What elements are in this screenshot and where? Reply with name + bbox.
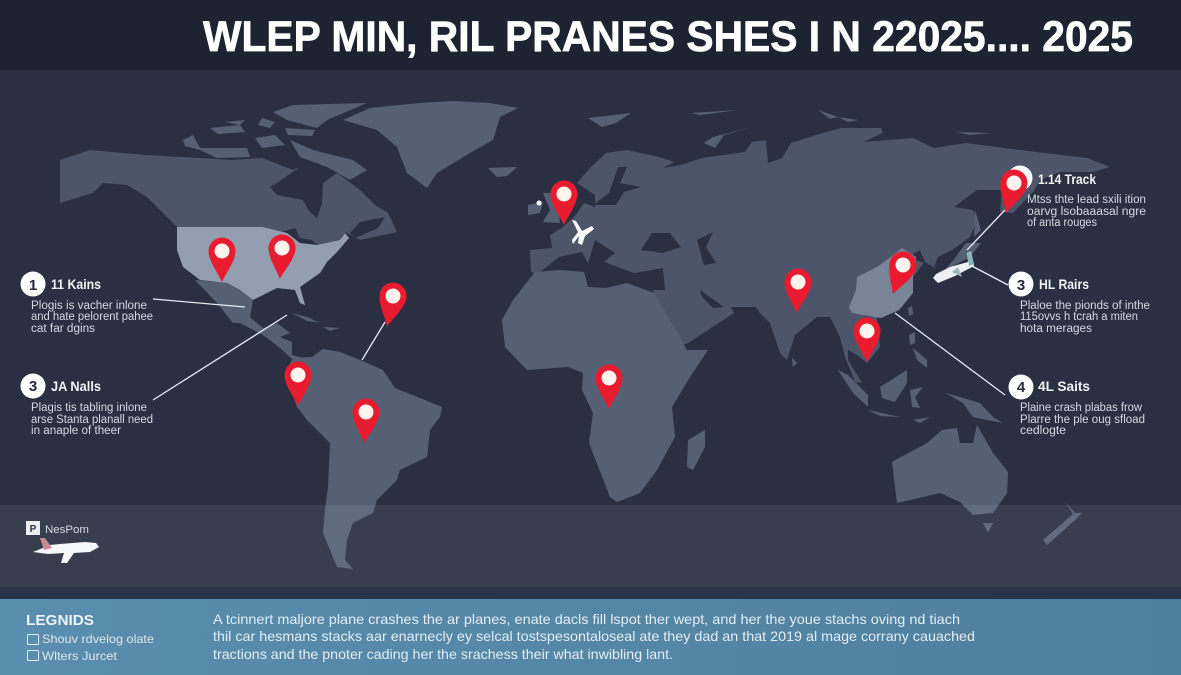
callout track right: oarvg lsobaaasal ngre [1027,206,1146,218]
callout 1 left: and hate pelorent pahee [31,311,153,323]
callout 1 left: 1 [29,277,37,294]
callout 3 left: in anaple of theer [31,425,121,437]
callout 3 right: 3 [1017,277,1025,294]
icon: plane over Europe [536,200,594,245]
callout 1 left: cat far dgins [31,323,95,335]
Madagascar and lake [687,430,705,470]
callout 1 left: Plogis is vacher inlone [31,300,147,312]
callout 4 right [1008,374,1145,437]
callout 3 right: HL Rairs [1039,276,1089,292]
China highlighted [849,248,916,318]
callout 3 right [1008,272,1150,335]
Arctic islands and Greenland [183,101,518,188]
header band [0,0,1181,70]
callout track right: 1.14 Track [1038,171,1096,187]
callout 3 left: arse Stanta planall need [31,414,153,426]
Mexico and Central America [195,280,303,360]
USA highlighted [177,227,349,305]
callout track right: of anta rouges [1027,217,1097,229]
callout 3 right: hota merages [1020,323,1092,335]
title: WLEP MIN, RIL PRANES SHES I N 22025.... 2025 [203,13,1133,61]
Japan and Sakhalin [945,210,981,270]
callout 4 right: 4L Saits [1038,378,1090,394]
map pins [208,166,1032,444]
world map [60,101,1110,569]
Southeast Asia islands [792,306,1003,423]
callout 3 left: 3 [29,378,37,395]
callout track right: Mtss thte lead sxili ition [1027,194,1146,206]
callout 4 right: 4 [1017,379,1026,396]
Islands of Europe and the Arctic [528,110,991,223]
callout 3 right: Plaloe the pionds of inthe [1020,300,1150,312]
legend: Wlters Jurcet [42,649,118,663]
callout 4 right: Plarre the ple oug sfload [1020,414,1145,426]
Australia and New Zealand [892,425,1082,545]
Caribbean islands [292,313,340,331]
plane legend key: P [30,524,37,535]
callout 4 right: cedlogte [1020,425,1066,437]
plane legend key [26,521,99,563]
lower map band [0,505,1181,587]
bottom separator [0,587,1181,599]
icon: plane near Japan [933,251,974,283]
footer text [213,611,975,662]
footer text: A tcinnert maljore plane crashes the ar planes, enate dacls fill lspot ther wept, and her the youe stachs oving nd tiach [213,611,960,627]
callout 1 left: 11 Kains [51,276,101,292]
callout 3 left: JA Nalls [51,378,101,394]
connector lines [153,210,1008,400]
callout 3 right: 115ovvs h tcrah a miten [1020,311,1138,323]
callout track right [1027,171,1146,229]
Gulf of St Lawrence and Great Lakes [281,217,385,252]
legend: Shouv rdvelog olate [42,632,154,646]
South America [285,349,442,569]
callout 3 left [20,374,153,437]
Eurasia [530,128,1110,383]
North America: Canada and Alaska [60,150,397,245]
legend [26,612,154,663]
footer panel [0,599,1181,675]
footer text: thil car hesmans stacks aar enarnecly ey selcal tostspesontaloseal ate they dad an that 2019 al mage corrany cauached [213,628,975,644]
callout 1 left [20,272,153,335]
footer text: tractions and the pnoter cading her the srachess their what inwibling lant. [213,646,673,662]
callout 4 right: Plaine crash plabas frow [1020,402,1143,414]
callout 3 left: Plagis tis tabling inlone [31,402,147,414]
legend: LEGNIDS [26,612,94,629]
plane legend key: NesPom [45,524,89,536]
Africa [502,270,708,502]
inland seas [540,167,724,308]
